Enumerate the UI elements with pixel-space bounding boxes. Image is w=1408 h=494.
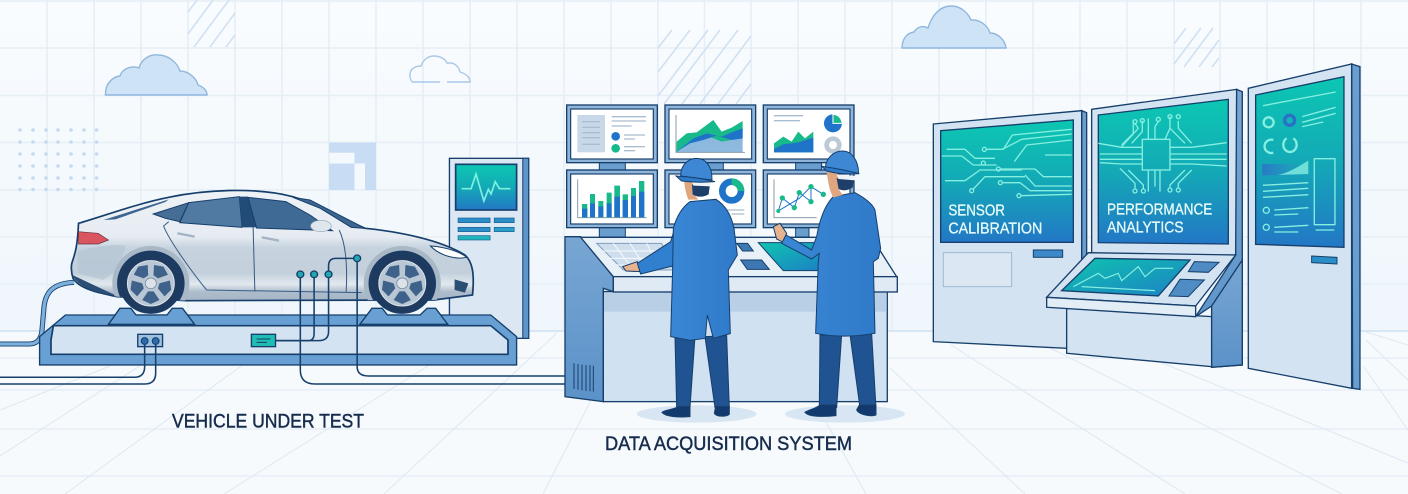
screen label: PERFORMANCE <box>1107 201 1212 218</box>
panel: performance analytics: ANALYTICS <box>1107 220 1184 237</box>
desk lip <box>613 277 897 292</box>
data acquisition station <box>565 105 905 423</box>
floor shadows <box>637 405 757 423</box>
monitor top right <box>763 105 854 171</box>
desk top surface <box>581 237 897 277</box>
hatch pattern top left <box>188 0 235 47</box>
monitor bottom left <box>567 170 657 237</box>
right head <box>827 171 843 198</box>
panel: analytics dashboard <box>1248 64 1360 389</box>
touch display <box>1062 258 1190 296</box>
blank plate <box>943 253 1012 287</box>
floor perspective lines <box>0 332 1408 494</box>
chip circuit <box>1098 115 1227 193</box>
monitor bottom right <box>763 170 854 237</box>
label: data acquisition system: DATA ACQUISITION SYSTEM <box>605 434 852 455</box>
data kiosk behind the car <box>449 158 529 338</box>
dynamometer platform <box>40 308 517 365</box>
screen label: SENSOR <box>948 202 1005 219</box>
hose from car to wall <box>0 282 74 344</box>
rear bumper <box>72 275 117 296</box>
vehicle test area <box>0 158 567 384</box>
slot <box>1033 250 1063 257</box>
screen <box>941 120 1073 242</box>
hatch pattern right <box>1174 28 1219 67</box>
hatch pattern centre <box>658 30 751 104</box>
control desk <box>565 237 897 402</box>
label: vehicle under test: VEHICLE UNDER TEST <box>172 412 364 432</box>
car <box>71 190 473 321</box>
blue chart band <box>1262 164 1309 175</box>
wall grid <box>0 0 1408 330</box>
touch display <box>758 243 823 271</box>
desk body <box>603 292 887 402</box>
console buttons <box>1188 262 1219 272</box>
decorative square pattern <box>329 142 376 190</box>
floor tile lines <box>0 358 1408 476</box>
screen <box>1256 77 1344 247</box>
car windows <box>153 203 189 222</box>
kiosk base <box>1067 308 1212 367</box>
panel: performance analytics <box>1047 89 1242 367</box>
tail light <box>79 232 108 244</box>
panel: sensor calibration <box>933 111 1087 348</box>
connector box <box>138 334 163 347</box>
rear quarter shading <box>77 245 126 280</box>
engineer left <box>623 158 737 417</box>
small panels <box>737 243 753 251</box>
monitor bottom centre <box>665 170 756 228</box>
right hand panels <box>933 64 1360 389</box>
dashboard art <box>1263 92 1336 232</box>
cloud outline centre <box>410 56 470 82</box>
screen <box>1098 99 1228 244</box>
headlight <box>431 246 467 258</box>
cloud left <box>105 55 207 95</box>
fog lamp <box>455 279 468 293</box>
wiring <box>0 258 567 384</box>
wheel arches <box>112 246 441 300</box>
monitor top left <box>567 105 657 171</box>
slot <box>1312 256 1337 264</box>
cloud right <box>902 6 1006 48</box>
monitor top centre <box>665 105 756 171</box>
sensors <box>297 255 361 278</box>
rear wheel <box>120 253 182 313</box>
circuit art <box>942 129 1072 198</box>
left hard hat <box>681 158 712 180</box>
left head <box>684 180 698 200</box>
desk vents <box>574 363 593 392</box>
keyboard <box>597 243 673 270</box>
car body <box>71 190 473 301</box>
right hard hat <box>825 151 859 174</box>
engineer right <box>773 151 881 416</box>
panel: sensor calibration: CALIBRATION <box>948 220 1042 237</box>
door lines <box>164 222 362 293</box>
dot grid <box>18 128 98 191</box>
front wheel <box>371 253 433 313</box>
desk side panel <box>565 237 613 402</box>
console <box>1047 253 1236 306</box>
teal module <box>251 334 276 347</box>
